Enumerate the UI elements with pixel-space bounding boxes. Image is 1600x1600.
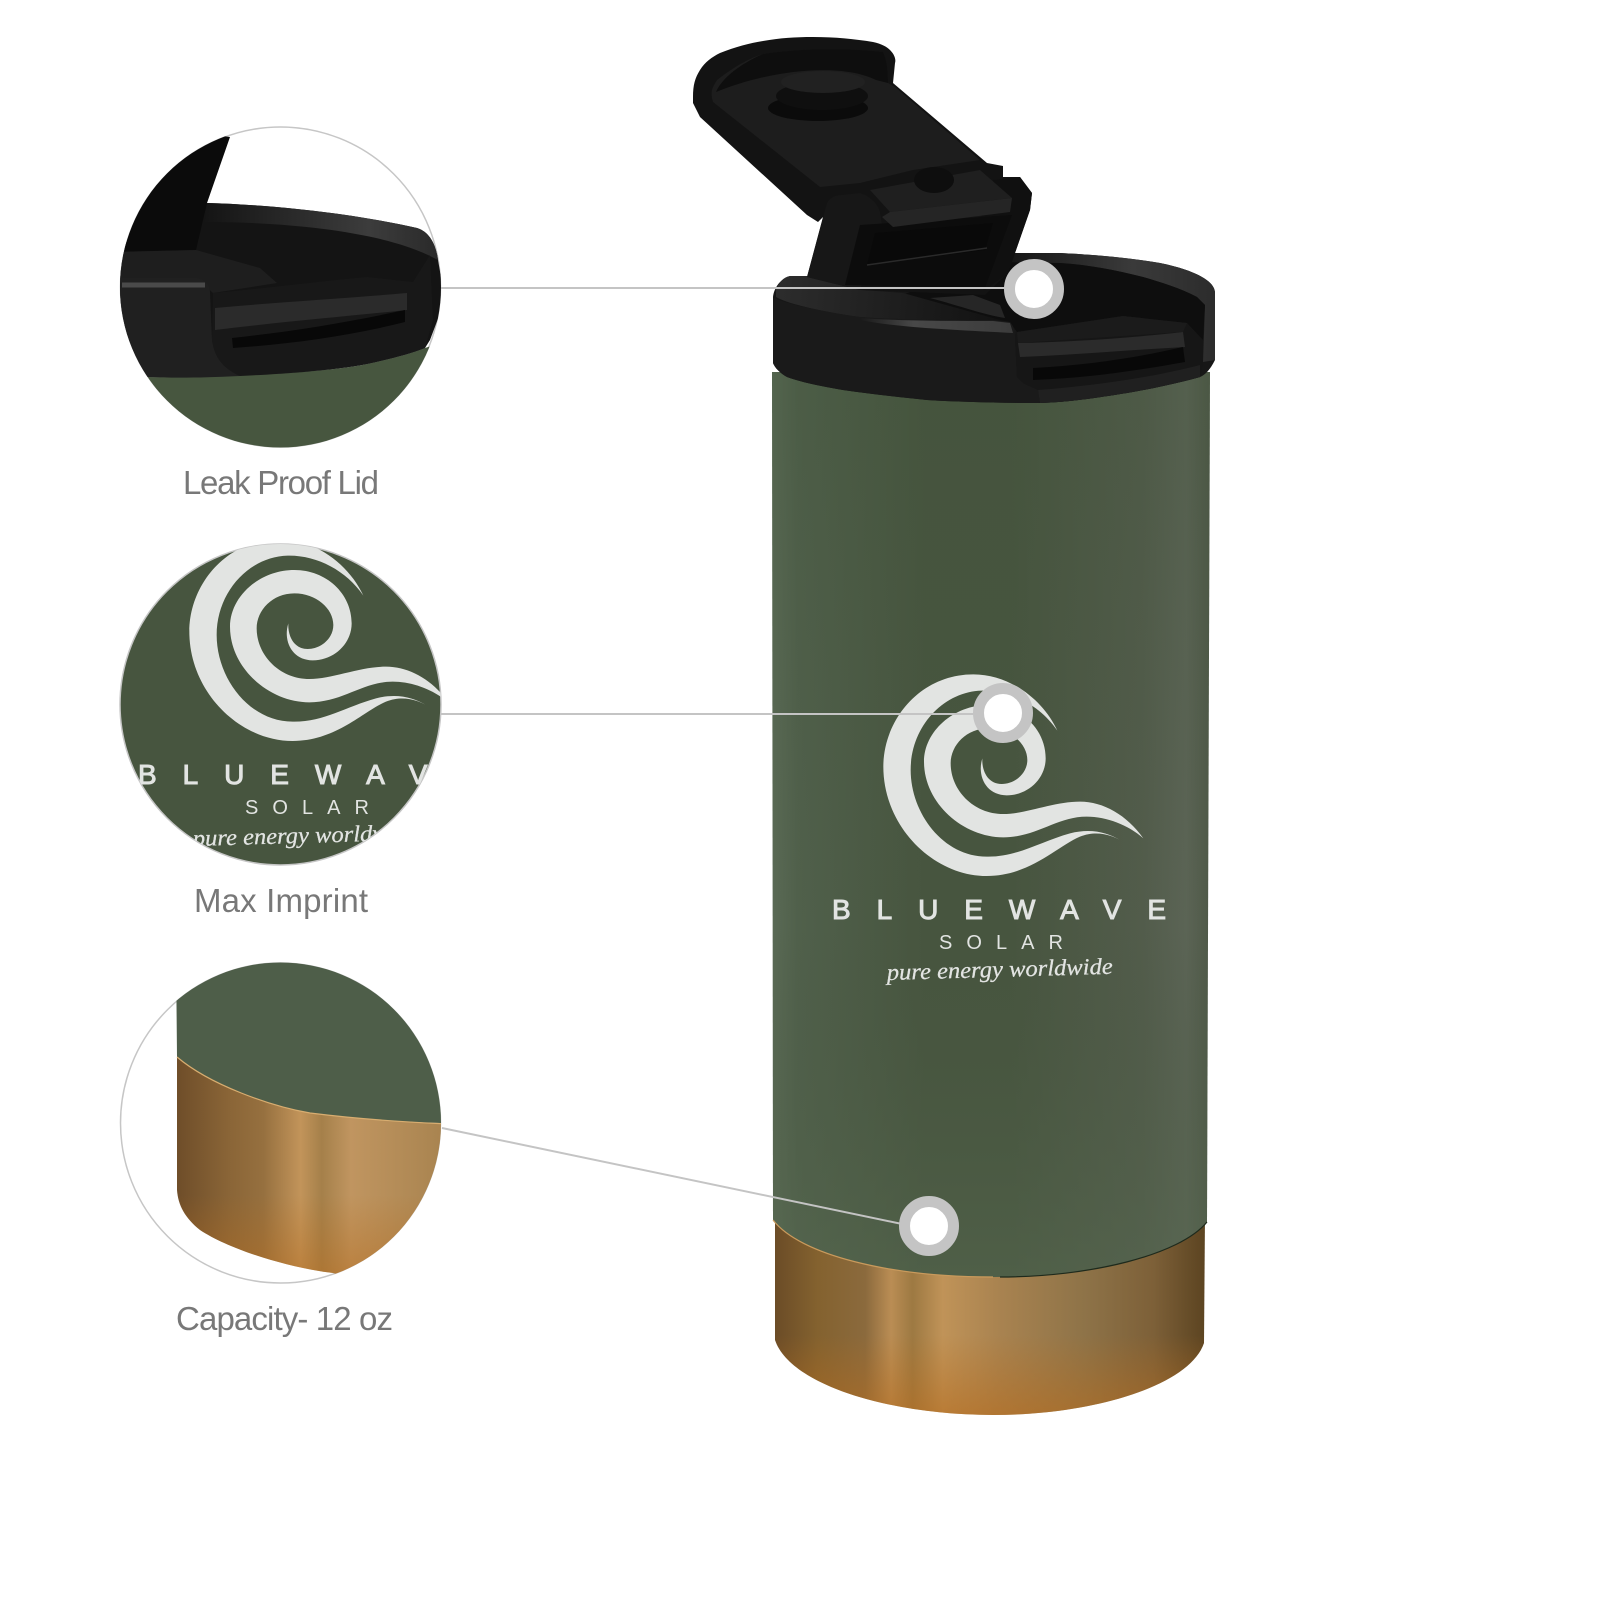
cap inner plate (712, 49, 980, 187)
lid rim (1010, 253, 1215, 362)
leader: imprint (441, 688, 1028, 738)
recess (212, 255, 433, 376)
green body strip (148, 346, 430, 448)
green body crop (176, 962, 441, 1123)
lid rim (205, 203, 438, 260)
leader: lid (441, 264, 1058, 314)
leader: capacity (442, 1128, 954, 1250)
printed logo (832, 674, 1166, 985)
marker: lid (1010, 264, 1058, 314)
magnified brand: BLUEWAVE (138, 759, 472, 790)
lid (773, 253, 1215, 403)
lower lip (1038, 365, 1200, 403)
lid inner well (900, 262, 1205, 340)
copper crop (177, 1058, 441, 1274)
tagline: pure energy worldwide (884, 954, 1113, 985)
top surface (776, 276, 1010, 322)
magnified sub brand: SOLAR (245, 797, 369, 819)
detail circle: imprint (120, 539, 472, 865)
drinking recess (1015, 316, 1203, 403)
latch (870, 170, 1012, 227)
lid front (773, 297, 1203, 403)
lid mass (110, 203, 445, 377)
brand name: BLUEWAVE (832, 894, 1166, 925)
speckled highlight (860, 318, 1013, 333)
front block (110, 278, 240, 378)
magnified logo (189, 539, 449, 741)
cap silhouette (693, 37, 1032, 295)
cap pin (914, 167, 954, 193)
label: lid: Leak Proof Lid (183, 464, 379, 501)
hinge window (867, 223, 993, 265)
copper base (775, 1215, 1205, 1415)
cap plug (768, 71, 868, 121)
detail circle: capacity (120, 962, 442, 1284)
label: capacity: Capacity- 12 oz (176, 1300, 393, 1337)
slot (232, 310, 405, 348)
marker: imprint (978, 688, 1028, 738)
label: imprint: Max Imprint (194, 882, 368, 919)
magnified tagline: pure energy worldwide (190, 820, 419, 851)
marker: capacity (904, 1202, 954, 1250)
sub brand: SOLAR (939, 932, 1063, 954)
detail circle: lid (120, 126, 442, 448)
front wall (773, 297, 1040, 403)
bottle (693, 37, 1215, 1415)
wave mark (883, 674, 1143, 876)
top surface (110, 250, 277, 293)
hinge posts (807, 177, 1032, 290)
open cap (124, 136, 230, 252)
green body (772, 372, 1210, 1277)
slot (1033, 347, 1185, 380)
flip cap (693, 37, 1032, 295)
